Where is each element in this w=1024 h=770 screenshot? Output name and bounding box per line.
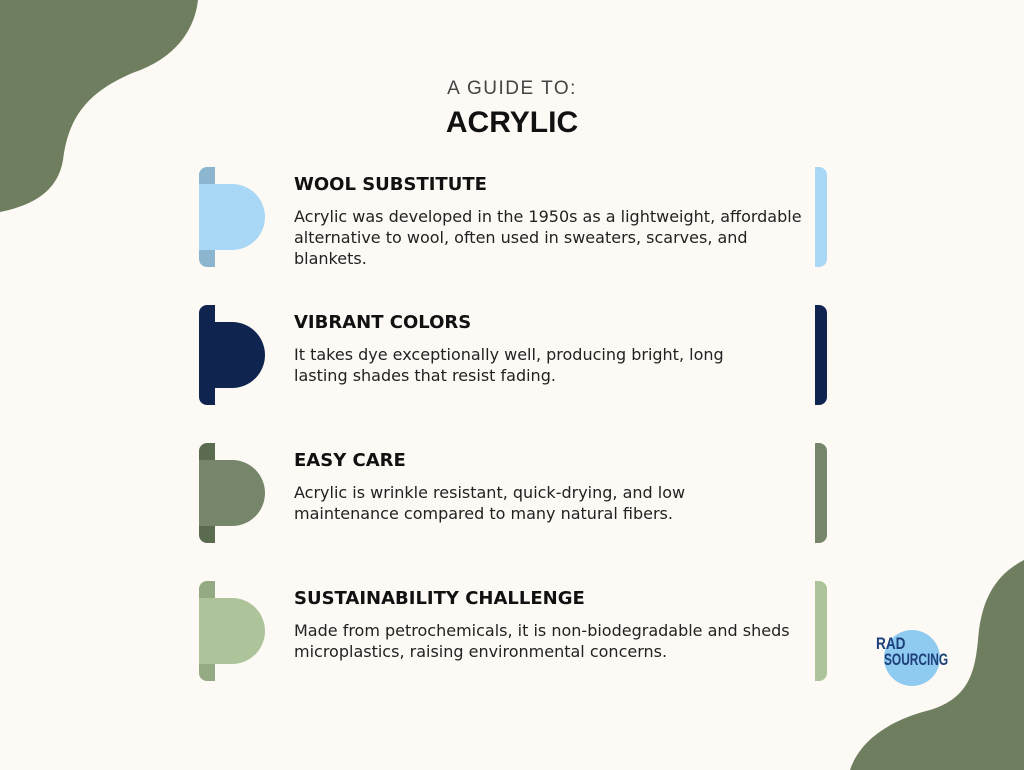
logo: SOURCING [884,650,948,669]
panel: wool substitute: WOOL SUBSTITUTE [294,174,487,195]
panel: easy care: Acrylic is wrinkle resistant, quick-drying, and low maintenance compared to many natural fibers. [294,483,685,523]
panel: easy care [199,443,827,543]
title: ACRYLIC [446,106,578,139]
logo [876,630,948,686]
panel: wool substitute [199,167,827,268]
panel: wool substitute: Acrylic was developed in the 1950s as a lightweight, affordable alternative to wool, often used in sweaters, scarves, and blankets. [294,207,802,268]
panel: vibrant colors: VIBRANT COLORS [294,312,471,333]
panel: sustainability challenge [199,581,827,681]
decorative blob bottom-right [850,560,1024,770]
panel: vibrant colors: It takes dye exceptionally well, producing bright, long lasting shades that resist fading. [294,345,724,385]
subtitle: A GUIDE TO: [447,78,577,99]
panel: sustainability challenge: Made from petrochemicals, it is non-biodegradable and sheds microplastics, raising environmental concerns. [294,621,790,661]
decorative blob top-left [0,0,198,212]
panel: sustainability challenge: SUSTAINABILITY CHALLENGE [294,588,585,609]
panel: vibrant colors [199,305,827,405]
logo: RAD [876,634,905,653]
panel: easy care: EASY CARE [294,450,406,471]
